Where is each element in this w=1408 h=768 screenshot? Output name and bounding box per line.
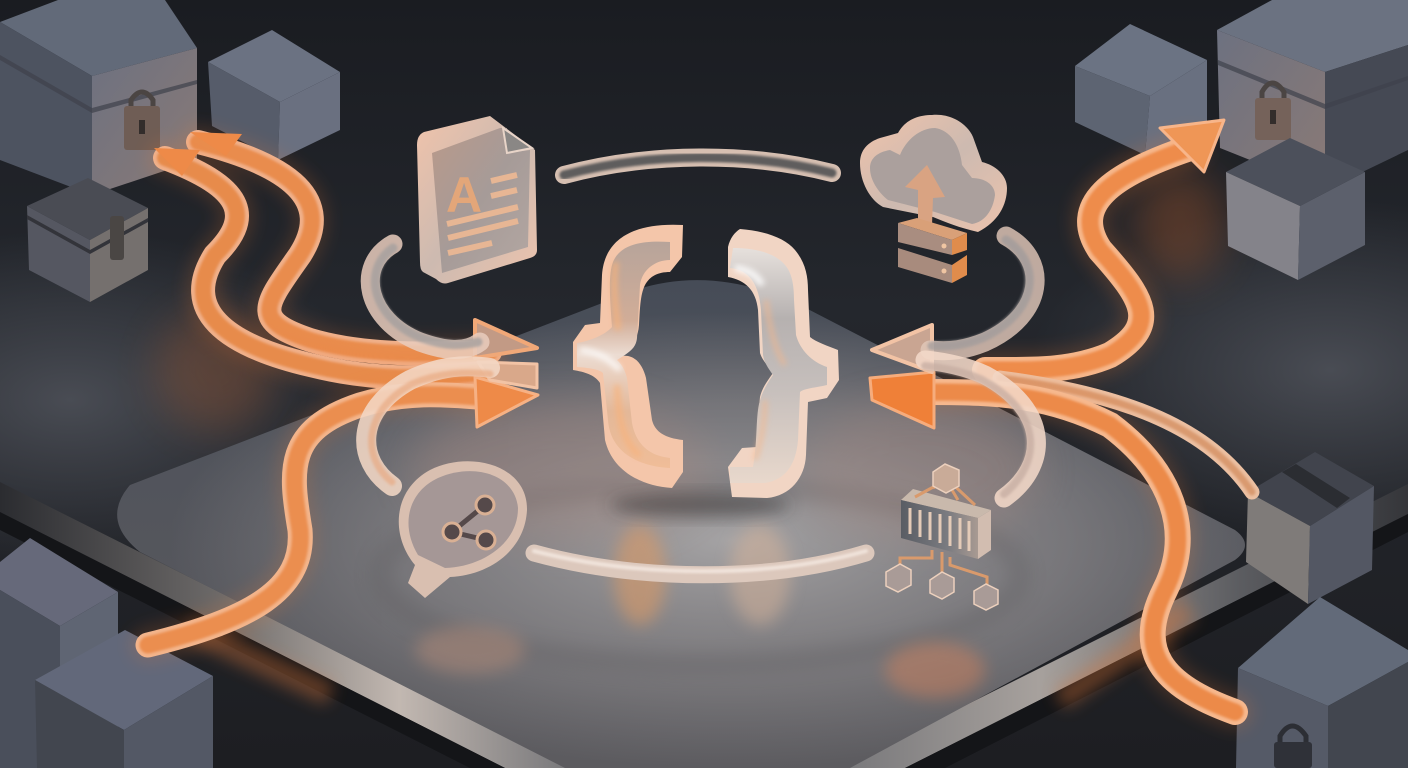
arrow: orange to bottom right (930, 392, 1235, 712)
glass bar: top (564, 157, 832, 175)
right curly brace (728, 229, 839, 498)
icon: chat bubble with share symbol (399, 461, 527, 598)
letter A: A (446, 167, 482, 223)
box: bottom left front cube (35, 630, 213, 768)
arrow: glass upper left (370, 244, 480, 350)
box: large locked crate top left (0, 0, 197, 195)
icon: padlock left (124, 92, 160, 150)
icon: padlock right (1255, 83, 1291, 140)
box: small cube top left (208, 30, 340, 160)
arrow: thin orange from right crate (1000, 378, 1252, 492)
document text lines (447, 175, 518, 253)
box: small cube top right (1075, 24, 1207, 155)
server stack (898, 218, 967, 283)
box: bottom right cube (1236, 597, 1408, 768)
box: strapped crate right (1246, 452, 1374, 604)
box: cube right (1226, 138, 1365, 280)
arrow: glass upper right (930, 236, 1035, 351)
icon: network hierarchy container (886, 464, 998, 610)
left curly brace (573, 225, 683, 488)
arrow: orange to top right (985, 148, 1190, 370)
arrow: upper inner orange from top left (198, 142, 490, 354)
share symbol (443, 496, 495, 549)
icon: padlock bottom right (1274, 726, 1312, 768)
arrow: orange from bottom left (148, 395, 490, 645)
icon: cloud upload with server (860, 115, 1007, 283)
arrowheads: left converging (475, 320, 538, 427)
plate reflections (190, 493, 1190, 700)
arrowheads: right converging (870, 325, 934, 428)
metal rails (0, 482, 1408, 768)
central metal plate (117, 280, 1290, 768)
arrow: glass lower right (925, 360, 1036, 498)
glass bar: bottom (534, 551, 866, 575)
arrow: glass lower left (366, 366, 490, 486)
box: lidded crate left (27, 178, 148, 302)
arrowheads: top left orange tails (154, 132, 242, 176)
box: large locked crate top right (1217, 0, 1408, 190)
upload arrow (905, 165, 945, 225)
arrow: outer orange from top left (165, 158, 490, 377)
icon: document (417, 116, 537, 284)
box: bottom left rear cube (0, 538, 118, 768)
arrowhead: top right (1160, 120, 1224, 172)
